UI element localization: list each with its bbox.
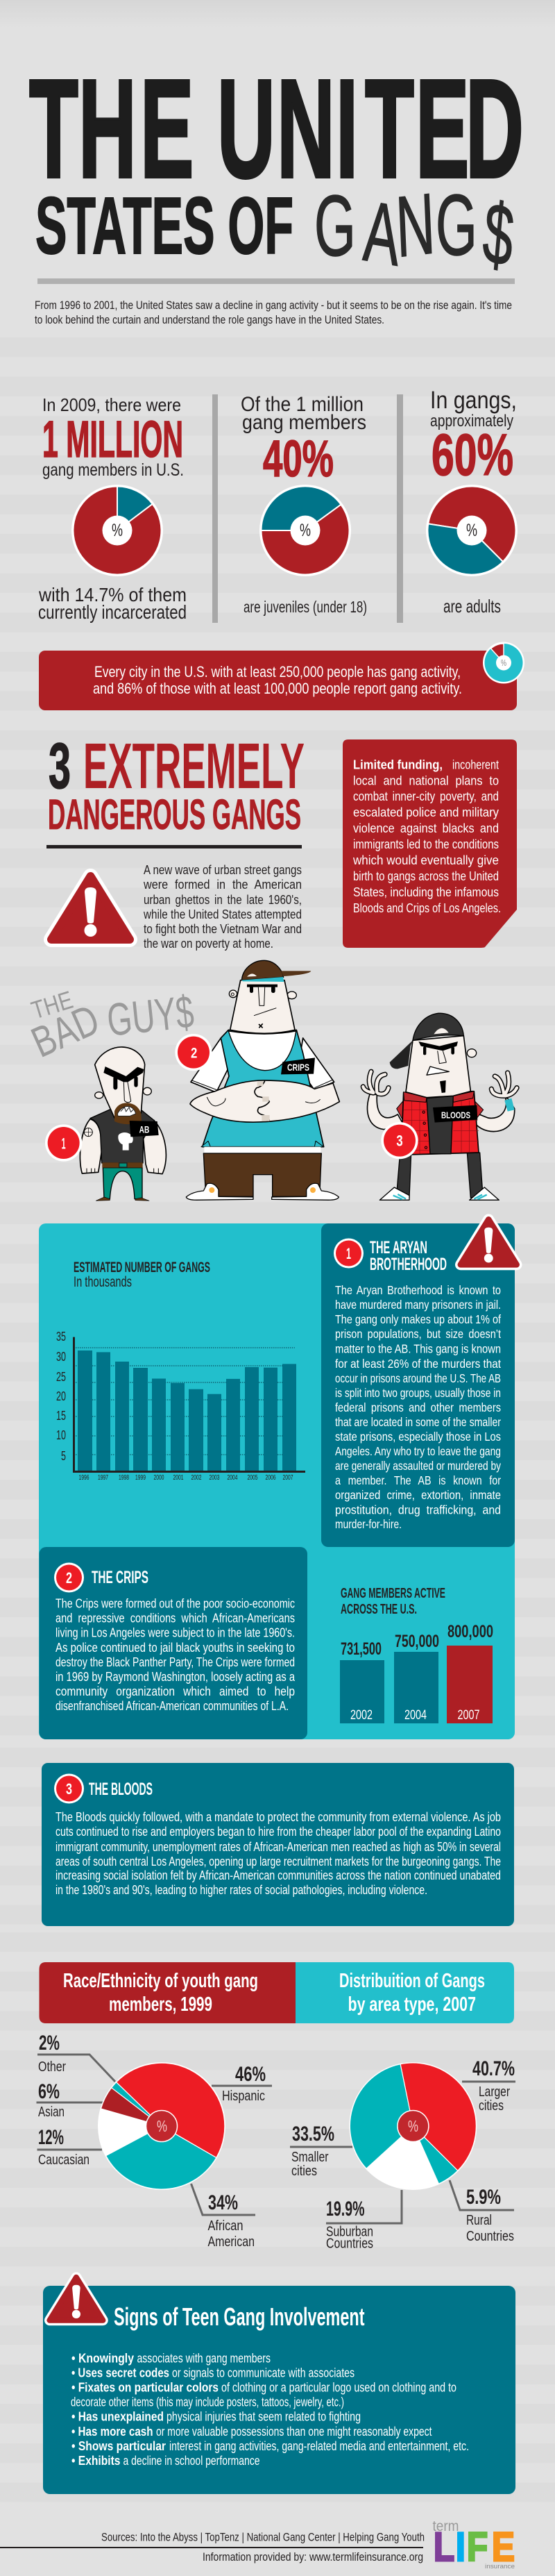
label: hispanic: 46% [235,2063,266,2086]
number badge 1: 1 [346,1245,351,1262]
list of signs [71,2351,469,2468]
heading: race ethnicity [39,1962,296,2023]
panel: 40 percent juveniles [241,393,367,616]
panel: the crips: destroy the Black Panther Party, The Crips were formed [56,1655,295,1669]
label: larger cities: 40.7% [472,2057,515,2080]
list of signs: • Uses secret codes [71,2366,169,2380]
panel: 1 million gang members: In 2009, there were [42,394,181,415]
panel: 60 percent adults: 60% [432,422,513,487]
bar chart: estimated number of gangs: 5 [61,1449,66,1463]
heading: the bad guys: GUY$ [105,985,196,1046]
text block: aryan brotherhood: is split into two groups, usually those in [335,1386,501,1400]
bar chart: estimated number of gangs: 1998 [119,1474,129,1482]
text block: aryan brotherhood: a member. The AB is known for [335,1473,501,1487]
bar chart: gang members active: 800,000 [447,1622,493,1641]
illustration: aryan brotherhood character [45,1047,166,1201]
label: caucasian: Caucasian [38,2152,89,2168]
panel: 60 percent adults [426,387,518,617]
illustration: crips character [175,960,339,1200]
label: caucasian: 12% [38,2126,64,2149]
bar chart: gang members active: 750,000 [395,1632,439,1651]
bar chart: estimated number of gangs: 2006 [265,1474,276,1482]
panel: the crips: in 1969 by Raymond Washington, loosely acting as a [56,1670,296,1684]
heading: 3 extremely dangerous gangs: EXTREMELY [83,730,305,802]
panel: 1 million gang members: currently incarcerated [38,601,187,623]
text block: aryan brotherhood: have murdered many prisoners in jail. [335,1298,501,1312]
text block: aryan brotherhood: The gang only makes up about 1% of [335,1312,501,1326]
pie chart: distribution by area [290,2057,515,2251]
text block: aryan brotherhood: prostitution, drug trafficking, and [335,1503,501,1516]
pie: 60 percent: % [466,521,477,540]
bar chart: estimated number of gangs: 2000 [154,1474,164,1482]
list of signs: or more valuable possessions than one might reasonably expect [156,2425,432,2439]
pie chart: race ethnicity: % [157,2117,167,2135]
label: larger cities: Larger [479,2084,510,2100]
panel: the bloods [42,1763,514,1926]
label: smaller cities: 33.5% [292,2123,334,2146]
text block: new wave [143,863,302,951]
panel: limited funding: States, including the infamous [353,885,499,899]
tag: bloods: BLOODS [441,1110,470,1121]
panel: limited funding: Limited funding, [353,758,443,772]
panel: 40 percent juveniles: gang members [242,411,366,434]
bar chart: gang members active: 2002 [350,1708,373,1723]
label: hispanic: Hispanic [222,2089,265,2104]
list of signs: • Fixates on particular colors [71,2380,219,2394]
text block: aryan brotherhood: murder-for-hire. [335,1517,402,1531]
label: hispanic [222,2063,266,2104]
bar chart: estimated number of gangs: 2007 [283,1474,293,1482]
panel: 1 million gang members [38,394,187,623]
label: smaller cities: cities [291,2164,317,2179]
bar chart: estimated number of gangs: 25 [56,1370,66,1384]
text block: aryan brotherhood: federal prisons and other members [335,1400,501,1414]
panel: limited funding [343,739,517,948]
list of signs: or signals to communicate with associates [172,2366,355,2380]
text block: aryan brotherhood: matter to the AB. This gang is known [335,1341,501,1355]
tag: AB [130,1121,159,1137]
bar chart: gang members active [340,1586,493,1723]
label: larger cities [472,2057,515,2114]
list of signs: • Knowingly [71,2351,134,2365]
footer: sources and credit: Sources: Into the Abyss | TopTenz | National Gang Center | Helping Gang Youth [101,2530,425,2543]
bar chart: gang members active: 731,500 [341,1639,382,1659]
text block: aryan brotherhood: organized crime, extortion, inmate [335,1488,501,1502]
label: african american [208,2191,255,2250]
pie: 40 percent [259,485,351,576]
bar chart: estimated number of gangs: 1999 [135,1474,146,1482]
panel: limited funding: violence against blacks and [353,821,499,835]
label: asian: Asian [38,2105,65,2120]
pie: 60 percent [426,485,518,576]
illustration: crips character: 2 [191,1044,197,1061]
panel: limited funding: local and national plans to [353,773,499,787]
list of signs: associates with gang members [137,2351,271,2365]
bar chart: gang members active: ACROSS THE U.S. [341,1602,417,1617]
illustration: bloods character: 3 [396,1132,403,1150]
panel: the crips: community organization which aimed to help [56,1684,295,1698]
label: smaller cities [291,2123,334,2179]
label: caucasian [38,2126,89,2168]
panel: the aryan brotherhood [321,1219,517,1547]
text block: aryan brotherhood: that are located in some of the smaller [335,1415,501,1429]
label: asian [38,2080,65,2120]
text block: new wave: while the United States attempted [143,908,302,921]
bar chart: estimated number of gangs: 2004 [228,1474,238,1482]
logo: term life insurance [433,2518,515,2570]
pie: 14.7 percent incarcerated: % [112,521,123,540]
list of signs: physical injuries that seem related to fighting [166,2410,361,2424]
panel: the aryan brotherhood: THE ARYAN [370,1238,427,1257]
panel: cyan gang statistics background [39,1223,515,1739]
panel: limited funding: immigrants led to the conditions [353,837,499,851]
footer: sources and credit: Information provided by: www.termlifeinsurance.org [203,2550,423,2564]
heading: distribution of gangs: by area type, 2007 [348,1993,476,2016]
label: larger cities: cities [479,2098,504,2114]
callout: every city: Every city in the U.S. with at least 250,000 people has gang activity, [94,663,461,680]
label: suburban countries [326,2198,373,2251]
bar chart: estimated number of gangs: In thousands [74,1274,132,1290]
callout: every city [39,642,524,710]
panel: limited funding: escalated police and military [353,805,499,819]
text block: aryan brotherhood: are generally assaulted or murdered by [335,1459,501,1473]
list of signs: interest in gang activities, gang-related media and entertainment, etc. [169,2439,469,2453]
pie: 86 percent [483,642,524,683]
label: suburban countries: Countries [326,2236,373,2251]
label: african american: American [208,2234,255,2250]
text block: aryan brotherhood: occur in prisons around the U.S. The AB [335,1371,501,1385]
panel: the bloods: in the 1980's and 90's, leading to higher rates of social pathologies, including violence. [56,1883,427,1897]
text block: new wave: were formed in the American [143,878,302,892]
heading: the bad guys: BAD [25,996,106,1067]
bar chart: estimated number of gangs: 35 [56,1330,66,1344]
logo: term life insurance: term [433,2518,459,2534]
label: other: Other [38,2059,66,2075]
heading: distribution of gangs: Distribuition of Gangs [339,1970,485,1992]
pie chart: race ethnicity [36,2032,272,2250]
text block: aryan brotherhood: state prisons, especially those in Los [335,1430,501,1444]
list of signs: • Shows particular [71,2439,166,2453]
bar chart: estimated number of gangs: 2005 [247,1474,258,1482]
logo: term life insurance: insurance [485,2563,515,2570]
heading: 3 extremely dangerous gangs: 3 [49,730,71,802]
list of signs: of clothing or a particular logo used on clothing and to [221,2380,456,2394]
footer: sources and credit [0,2530,425,2564]
callout: every city: and 86% of those with at least 100,000 people report gang activity. [93,680,462,697]
bar chart: estimated number of gangs: 1996 [79,1474,89,1482]
panel: 1 million gang members: 1 MILLION [42,410,183,468]
panel: the crips: As police continued to jail black youths in seeking to [56,1641,295,1655]
number badge 2 [54,1562,84,1593]
heading: 3 extremely dangerous gangs: DANGEROUS GANGS [48,791,301,838]
title: THE UNITED [29,50,524,207]
bar chart: estimated number of gangs: 2002 [191,1474,202,1482]
panel: the crips [39,1547,307,1739]
title: GANG$ [314,175,518,285]
illustration: aryan brotherhood character: 1 [62,1135,66,1152]
bar chart: estimated number of gangs: 1997 [98,1474,108,1482]
bar chart: estimated number of gangs: 10 [56,1428,66,1442]
panel: the crips: The Crips were formed out of the poor socio-economic [56,1597,295,1611]
bar chart: estimated number of gangs: 30 [56,1350,66,1364]
panel: 1 million gang members: gang members in U.S. [42,460,184,480]
label: other: 2% [39,2032,60,2055]
number badge 3 [54,1773,84,1804]
panel: signs of teen gang involvement: Signs of Teen Gang Involvement [114,2302,365,2331]
bar chart: estimated number of gangs: 15 [56,1409,66,1423]
heading: race ethnicity: Race/Ethnicity of youth gang [63,1970,258,1992]
logo: term life insurance: L [434,2525,454,2570]
label: rural countries [466,2186,514,2244]
label: african american: 34% [208,2191,238,2214]
intro text [35,299,512,326]
logo: term life insurance: F [467,2525,488,2570]
heading: distribution of gangs [296,1962,514,2023]
panel: limited funding: Bloods and Crips of Los Angeles. [353,901,501,915]
label: rural countries: Rural [466,2213,492,2228]
text block: aryan brotherhood: Angeles. Any who try to leave the gang [335,1444,501,1458]
panel: 60 percent adults: In gangs, [430,387,517,414]
panel: the crips: and repressive conditions which African-Americans [56,1612,295,1625]
number badge 2: 2 [66,1569,72,1587]
list of signs: decorate other items (this may include posters, tattoos, jewelry, etc.) [71,2395,344,2409]
label: african american: African [208,2218,243,2234]
text block: aryan brotherhood: for at least 26% of the murders that [335,1357,501,1371]
tag: bloods [433,1105,477,1123]
pie: 86 percent: % [501,658,506,668]
panel: 60 percent adults: approximately [430,412,513,430]
tag: AB: AB [139,1123,149,1135]
panel: limited funding: which would eventually give [352,853,499,867]
heading: the bad guys [25,985,196,1067]
heading: race ethnicity: members, 1999 [109,1993,212,2016]
text block: new wave: urban ghettos in the late 1960's, [144,893,302,907]
logo: term life insurance: E [492,2525,515,2570]
list of signs: • Has unexplained [71,2410,164,2424]
pie chart: distribution by area: % [408,2117,418,2135]
list of signs: • Has more cash [71,2425,153,2439]
panel: 40 percent juveniles: Of the 1 million [241,393,364,416]
bar chart: estimated number of gangs [56,1260,305,1482]
tag: crips [281,1057,315,1074]
icon: warning triangle [51,876,130,939]
bar chart: gang members active: 2004 [404,1708,427,1723]
bar chart: estimated number of gangs: 2001 [173,1474,184,1482]
panel: limited funding: birth to gangs across the United [353,869,499,883]
panel: 1 million gang members: with 14.7% of them [38,584,187,605]
bar chart: gang members active: GANG MEMBERS ACTIVE [341,1586,445,1601]
label: asian: 6% [38,2080,60,2103]
text block: new wave: A new wave of urban street gangs [144,863,302,877]
text block: aryan brotherhood [335,1283,501,1531]
intro text: to look behind the curtain and understand the role gangs have in the United States. [35,313,384,326]
title [29,50,524,285]
bar chart: gang members active: 2007 [458,1708,480,1723]
panel: limited funding: combat inner-city poverty, and [353,789,499,803]
bar chart: estimated number of gangs: ESTIMATED NUMBER OF GANGS [74,1260,210,1276]
panel: the crips: THE CRIPS [92,1568,148,1587]
panel: 40 percent juveniles: 40% [263,430,334,487]
label: smaller cities: Smaller [291,2150,329,2165]
pie: 40 percent: % [300,521,311,540]
label: suburban countries: Suburban [326,2225,373,2240]
logo: term life insurance: I [456,2525,466,2570]
label: rural countries: Countries [466,2229,514,2244]
label: other [38,2032,66,2075]
list of signs: a decline in school performance [123,2454,259,2468]
panel: the bloods: THE BLOODS [89,1780,153,1799]
bar chart: estimated number of gangs: 2003 [210,1474,220,1482]
panel: signs of teen gang involvement [43,2277,515,2494]
number badge 1 [334,1239,364,1268]
pie: 14.7 percent incarcerated [71,485,163,576]
tag: crips: CRIPS [287,1062,309,1073]
panel: limited funding: incoherent [452,758,499,772]
text block: new wave: to fight both the Vietnam War and [144,922,302,936]
text block: aryan brotherhood: The Aryan Brotherhood is known to [335,1283,501,1297]
heading: 3 extremely dangerous gangs [48,730,305,838]
label: suburban countries: 19.9% [326,2198,365,2220]
title: STATES OF [35,181,293,271]
bar chart: estimated number of gangs: 20 [56,1389,66,1403]
heading: the bad guys: THE [28,985,76,1025]
icon: warning triangle [461,1219,517,1264]
illustration: bloods character [363,1013,517,1200]
icon: warning triangle [49,2277,103,2320]
panel: 40 percent juveniles: are juveniles (under 18) [244,598,367,616]
number badge 3: 3 [66,1780,72,1798]
panel: the crips: living in Los Angeles were subject to in the late 1960's. [56,1626,295,1640]
list of signs: • Exhibits [71,2454,121,2468]
label: rural countries: 5.9% [466,2186,501,2209]
panel: the crips: disenfranchised African-American communities of L.A. [56,1699,289,1713]
panel: 60 percent adults: are adults [443,596,501,617]
panel: the aryan brotherhood: BROTHERHOOD [370,1255,447,1274]
text block: new wave: the war on poverty at home. [144,937,273,951]
text block: aryan brotherhood: prison populations, but size doesn’t [335,1327,501,1341]
